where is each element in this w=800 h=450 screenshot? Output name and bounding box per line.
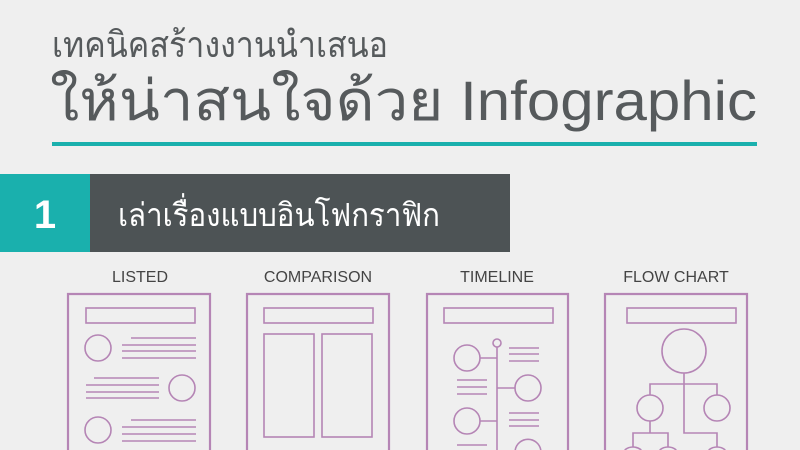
teal underline bbox=[52, 142, 757, 146]
labels: TIMELINE bbox=[460, 269, 534, 286]
title line 2: ให้น่าสนใจด้วย Infographic bbox=[50, 69, 757, 132]
labels: COMPARISON bbox=[264, 269, 372, 286]
labels bbox=[112, 269, 729, 286]
section banner bbox=[0, 174, 510, 252]
labels: FLOW CHART bbox=[623, 269, 729, 286]
panel: flow chart bbox=[605, 294, 747, 450]
panel: listed bbox=[68, 294, 210, 450]
labels: LISTED bbox=[112, 269, 168, 286]
section banner: 1 bbox=[34, 193, 56, 237]
title line 1: เทคนิคสร้างงานนำเสนอ bbox=[52, 24, 388, 65]
panel: timeline bbox=[427, 294, 568, 450]
panel: comparison bbox=[247, 294, 389, 450]
section banner: เล่าเรื่องแบบอินโฟกราฟิก bbox=[118, 193, 440, 233]
